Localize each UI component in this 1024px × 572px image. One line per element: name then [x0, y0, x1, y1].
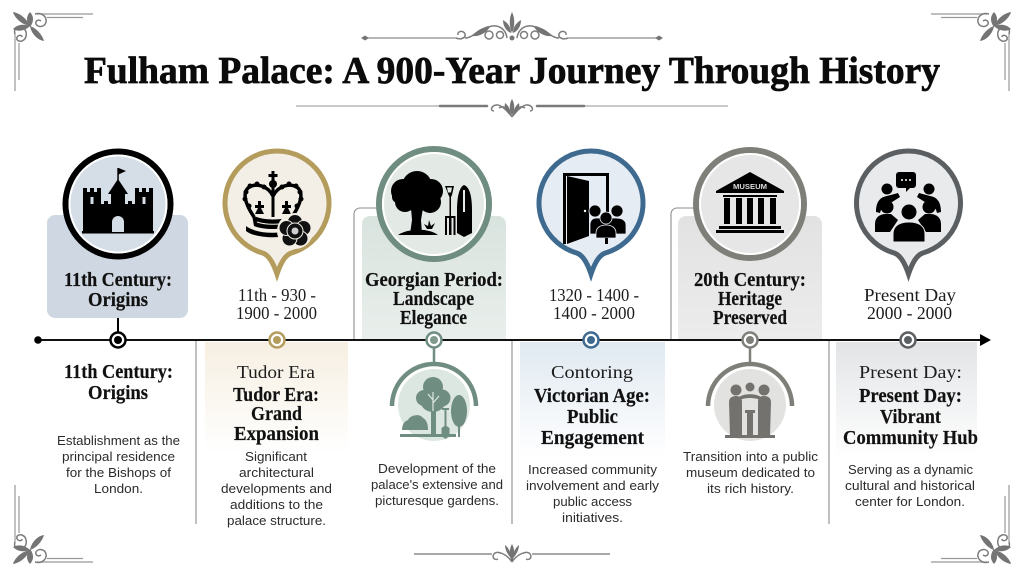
- heading: Georgian top: [365, 270, 503, 329]
- column 6 text: Present Day:: [859, 362, 962, 382]
- timeline node 4: [584, 332, 598, 348]
- icon: garden emblem: [392, 348, 476, 441]
- icon: castle badge: [66, 152, 170, 256]
- icon: open door with visitors pin: [539, 151, 643, 274]
- column dividers: [196, 341, 829, 524]
- timeline axis with arrow: [34, 334, 991, 346]
- column 1 text: for the Bishops of: [66, 465, 171, 480]
- dates: Present Day: 2000 - 2000: [867, 303, 952, 323]
- column 5 text: Transition into a public: [683, 449, 819, 464]
- timeline node 6: [900, 332, 916, 348]
- dates: Tudor: [236, 285, 317, 323]
- column 5 text: [683, 449, 819, 496]
- dates: Victorian: 1400 - 2000: [553, 303, 635, 323]
- title underline ornament: [296, 99, 728, 117]
- column 2 text: architectural: [239, 465, 314, 480]
- column 3 text: [371, 461, 503, 508]
- dates: Present Day: Present Day: [864, 285, 956, 305]
- corner ornament: top left: [13, 12, 93, 91]
- bottom ornament: [414, 544, 610, 562]
- column 1 text: Establishment as the: [57, 433, 180, 448]
- column 2 text: Grand: [251, 404, 302, 425]
- panel: Present Day lower band: [836, 342, 977, 458]
- heading: Georgian top: Elegance: [400, 308, 467, 329]
- column 1 text: principal residence: [62, 449, 175, 464]
- column 4 text: public access: [553, 494, 632, 509]
- panel: Georgian top card: [362, 216, 506, 340]
- column 2 text: Tudor Era:: [233, 385, 319, 406]
- panel: 11th century top card: [47, 215, 188, 318]
- heading: Georgian top: Landscape: [393, 289, 474, 310]
- column 6 text: Community Hub: [843, 428, 978, 449]
- timeline node 5: [742, 332, 758, 348]
- icon: museum badge: [696, 150, 804, 258]
- dates: Tudor: 1900 - 2000: [236, 303, 317, 323]
- top flourish ornament: [361, 12, 663, 40]
- column 1 text: [57, 362, 180, 496]
- icon: museum badge: MUSEUM: [733, 184, 767, 191]
- column 4 text: Public: [567, 407, 618, 428]
- icon: crown and rose pin: [225, 151, 329, 274]
- icon: community discussion pin: [856, 151, 960, 274]
- column 4 text: Victorian Age:: [534, 386, 650, 407]
- column 2 text: Significant: [245, 449, 307, 464]
- bracket line: 20th century: [671, 208, 696, 340]
- column 3 text: Development of the: [378, 461, 496, 476]
- column 3 text: picturesque gardens.: [375, 493, 499, 508]
- column 6 text: Present Day:: [859, 386, 962, 407]
- timeline node 2: [270, 332, 284, 348]
- corner ornament: bottom left: [13, 485, 93, 564]
- heading: 20th century top: 20th Century:: [694, 270, 806, 291]
- column 3 text: palace's extensive and: [371, 477, 503, 492]
- bracket line: Georgian: [354, 208, 380, 340]
- column 2 text: palace structure.: [227, 513, 326, 528]
- column 4 text: [526, 362, 660, 525]
- corner ornament: bottom right: [931, 485, 1011, 564]
- heading: Georgian top: Georgian Period:: [365, 270, 503, 291]
- column 4 text: initiatives.: [562, 510, 623, 525]
- column 4 text: Contoring: [551, 362, 633, 382]
- column 5 text: museum dedicated to: [686, 465, 815, 480]
- title: Fulham Palace: A 900-Year Journey Through History: [84, 50, 940, 92]
- timeline node 3: [426, 332, 442, 348]
- column 4 text: involvement and early: [526, 478, 660, 493]
- dates: Victorian: [549, 285, 639, 323]
- heading: 20th century top: [694, 270, 806, 329]
- heading: 11th century top: [64, 270, 172, 311]
- dates: Present Day: [864, 285, 956, 323]
- panel: 20th century top card: [678, 216, 822, 340]
- heading: 20th century top: Preserved: [713, 308, 787, 329]
- column 4 text: Increased community: [528, 462, 658, 477]
- corner ornament: top right: [931, 12, 1011, 91]
- column 6 text: cultural and historical: [845, 478, 975, 493]
- heading: 20th century top: Heritage: [718, 289, 782, 310]
- timeline node 1: [110, 332, 126, 348]
- panel: Victorian lower band: [520, 342, 665, 458]
- dates: Tudor: 11th - 930 -: [238, 285, 316, 305]
- connector: 11th century: [117, 318, 119, 333]
- column 6 text: [843, 362, 978, 509]
- dates: Victorian: 1320 - 1400 -: [549, 285, 639, 305]
- column 1 text: London.: [94, 481, 143, 496]
- column 4 text: Engagement: [541, 428, 644, 449]
- column 2 text: Expansion: [234, 424, 319, 445]
- column 6 text: center for London.: [855, 494, 965, 509]
- panel: Tudor lower band: [205, 342, 348, 454]
- column 2 text: [221, 362, 332, 528]
- heading: 11th century top: Origins: [88, 290, 148, 311]
- icon: museum visitors emblem: [708, 348, 792, 441]
- column 2 text: Tudor Era: [237, 362, 315, 382]
- column 1 text: 11th Century:: [64, 362, 173, 383]
- column 1 text: Origins: [88, 383, 148, 404]
- column 5 text: its rich history.: [707, 481, 794, 496]
- icon: tree and tools badge: [379, 149, 489, 259]
- column 6 text: Serving as a dynamic: [848, 462, 974, 477]
- column 6 text: Vibrant: [880, 407, 941, 428]
- column 2 text: additions to the: [230, 497, 323, 512]
- column 2 text: developments and: [221, 481, 332, 496]
- heading: 11th century top: 11th Century:: [64, 270, 172, 291]
